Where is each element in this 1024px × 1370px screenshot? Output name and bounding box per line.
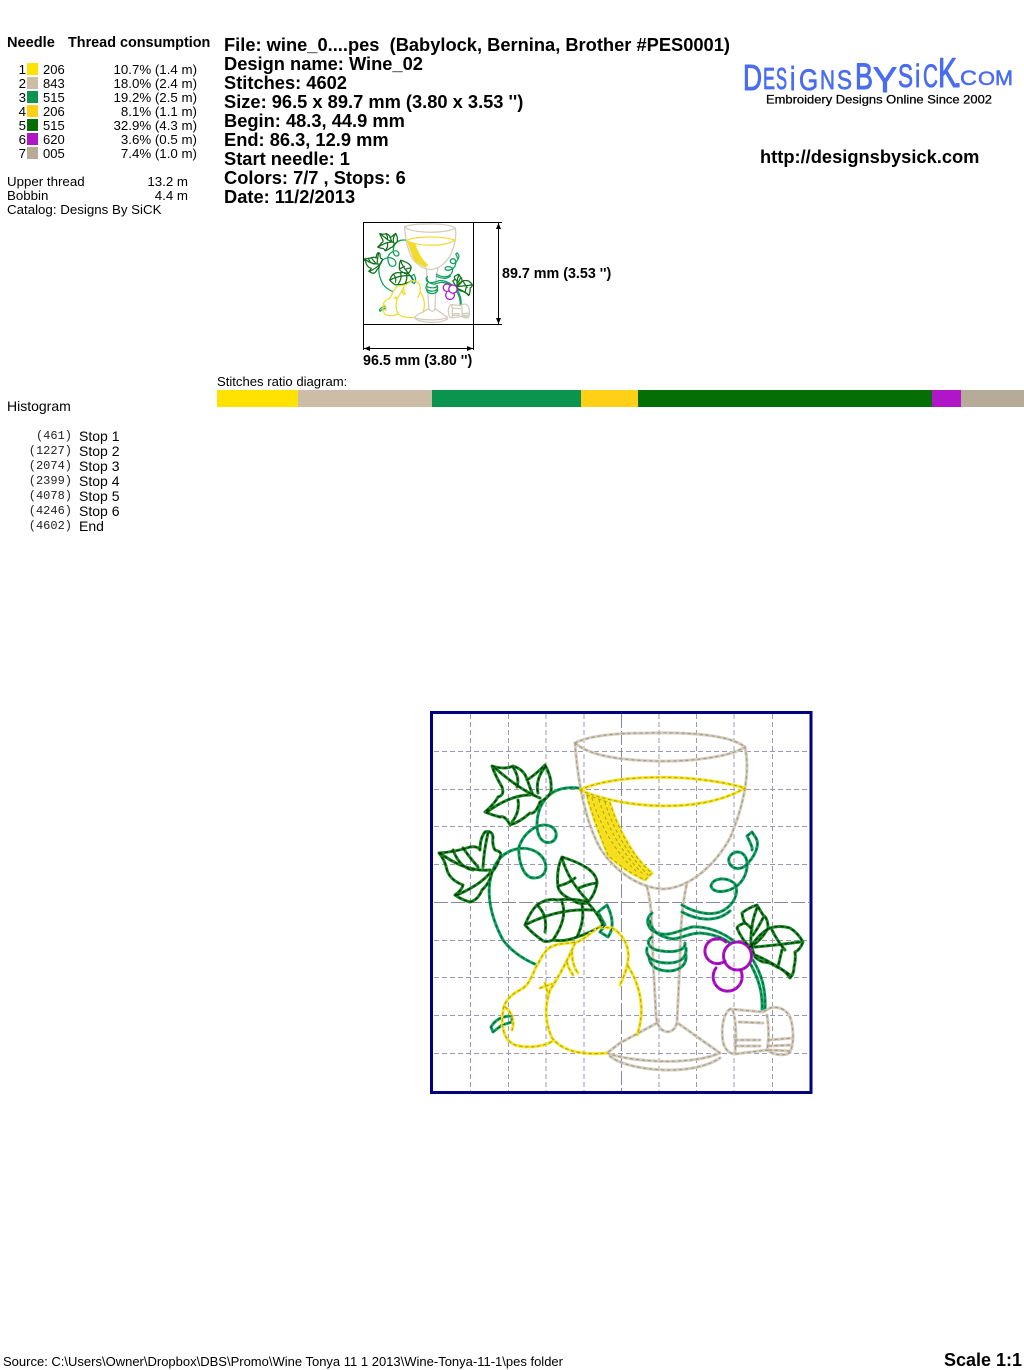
text block: design information: Begin: 48.3, 44.9 mm xyxy=(224,110,405,131)
grapes xyxy=(705,939,752,991)
thread row 5: 515 xyxy=(43,118,65,133)
thread row 1: 1 xyxy=(19,62,26,77)
panel: needle and thread consumption table xyxy=(7,35,210,217)
thread row 3: 3 xyxy=(19,90,26,105)
logo: Designs By SiCK: S xyxy=(898,58,913,94)
thread row 4: 206 xyxy=(43,104,65,119)
logo: Designs By SiCK: S xyxy=(837,66,852,95)
stop list: (4078) xyxy=(29,489,72,503)
stop list: Stop 6 xyxy=(79,503,119,519)
thread row 2: 18.0% (2.4 m) xyxy=(113,76,197,91)
chart: stitches ratio bar xyxy=(217,390,1024,407)
stop list: Stop 1 xyxy=(79,428,119,444)
website url: http://designsbysick.com xyxy=(760,146,979,167)
panel: embroidery preview at full scale xyxy=(432,712,811,1092)
thread row 6: 6 xyxy=(19,132,26,147)
logo: Designs By SiCK: . xyxy=(953,57,962,94)
thread row 6: 3.6% (0.5 m) xyxy=(121,132,197,147)
thumbnail artwork xyxy=(364,224,472,322)
leaves xyxy=(439,765,803,978)
thread row 3 xyxy=(19,90,197,105)
thread row 2: 843 xyxy=(43,76,65,91)
stop list: (461) xyxy=(36,429,72,443)
text block: design information: Colors: 7/7 , Stops: 6 xyxy=(224,167,406,188)
logo: Designs By SiCK: E xyxy=(763,62,775,96)
embroidery artwork xyxy=(439,733,803,1070)
logo: Designs By SiCK: D xyxy=(743,57,762,98)
thread totals and catalog: Catalog: Designs By SiCK xyxy=(7,202,161,217)
logo: Designs By SiCK: i xyxy=(915,59,920,95)
stop list: Stop 2 xyxy=(79,443,119,459)
preview frame xyxy=(432,712,811,1092)
scale label: Scale 1:1 xyxy=(944,1350,1022,1370)
text block: design information: Date: 11/2/2013 xyxy=(224,186,355,207)
grid xyxy=(434,714,809,1091)
wine surface and satin band xyxy=(580,777,745,880)
logo: Designs By SiCK: Embroidery Designs Online Since 2002 xyxy=(766,92,992,106)
thread row 1: 206 xyxy=(43,62,65,77)
stop list: (4246) xyxy=(29,504,72,518)
thread totals and catalog: Upper thread xyxy=(7,174,85,189)
thread row 3: 19.2% (2.5 m) xyxy=(113,90,197,105)
logo: Designs By SiCK: O xyxy=(978,68,995,90)
thread row 4 xyxy=(18,104,197,119)
thread totals and catalog: 13.2 m xyxy=(147,174,188,189)
logo: Designs By SiCK: i xyxy=(790,61,795,98)
stop list: (4602) xyxy=(29,519,72,533)
stop list: Stop 5 xyxy=(79,488,119,504)
dimension lines xyxy=(364,222,502,350)
text block: design information: File: wine_0....pes (Babylock, Bernina, Brother #PES0001) xyxy=(224,34,730,55)
vine xyxy=(489,788,765,1032)
width dimension label: 96.5 mm (3.80 '') xyxy=(363,353,473,369)
stop list xyxy=(29,428,120,534)
logo: Designs By SiCK: N xyxy=(820,67,835,96)
height dimension label: 89.7 mm (3.53 '') xyxy=(502,266,612,282)
stitch dashes xyxy=(439,733,803,1070)
thread row 7 xyxy=(19,146,197,161)
thread row 4: 4 xyxy=(19,104,26,119)
thread row 1: 10.7% (1.4 m) xyxy=(113,62,197,77)
stop list: (1227) xyxy=(29,444,72,458)
logo: Designs By SiCK: G xyxy=(799,63,818,97)
thread row 7: 7 xyxy=(19,146,26,161)
text block: design information xyxy=(224,34,730,207)
dimension arrowheads xyxy=(364,223,501,351)
text block: design information: Start needle: 1 xyxy=(224,148,350,169)
text block: design information: Size: 96.5 x 89.7 mm (3.80 x 3.53 '') xyxy=(224,91,523,112)
logo: Designs By SiCK: S xyxy=(776,63,787,96)
stop list: End xyxy=(79,518,104,534)
heading: thread consumption: Thread consumption xyxy=(68,35,210,51)
stop list: Stop 3 xyxy=(79,458,119,474)
label: stitches ratio diagram: Stitches ratio diagram: xyxy=(217,374,347,389)
text block: design information: Design name: Wine_02 xyxy=(224,53,423,74)
thread row 1 xyxy=(19,62,197,77)
thread row 2 xyxy=(19,76,197,91)
logo: Designs By SiCK: C xyxy=(960,66,977,90)
thread row 5: 5 xyxy=(19,118,26,133)
wine glass xyxy=(575,733,747,1070)
thread row 6: 620 xyxy=(43,132,65,147)
source path: Source: C:\Users\Owner\Dropbox\DBS\Promo\Wine Tonya 11 1 2013\Wine-Tonya-11-1\pes folder xyxy=(3,1354,563,1369)
thread row 3: 515 xyxy=(43,90,65,105)
logo: Designs By SiCK: M xyxy=(995,66,1013,90)
thread row 7: 005 xyxy=(43,146,65,161)
panel: histogram stops xyxy=(7,398,120,534)
heading: histogram: Histogram xyxy=(7,398,71,414)
thread row 4: 8.1% (1.1 m) xyxy=(121,104,197,119)
stop list: Stop 4 xyxy=(79,473,119,489)
stop list: (2399) xyxy=(29,474,72,488)
thread row 2: 2 xyxy=(19,76,26,91)
thread totals and catalog: Bobbin xyxy=(7,188,48,203)
cork xyxy=(722,1007,793,1055)
thread row 7: 7.4% (1.0 m) xyxy=(121,146,197,161)
thread row 5 xyxy=(19,118,197,133)
text block: design information: End: 86.3, 12.9 mm xyxy=(224,129,389,150)
panel: thumbnail with dimension lines xyxy=(363,222,612,369)
logo: Designs By SiCK xyxy=(743,52,1013,106)
logo: Designs By SiCK: B xyxy=(855,55,873,97)
thread totals and catalog xyxy=(7,174,188,217)
thread totals and catalog: 4.4 m xyxy=(155,188,188,203)
text block: design information: Stitches: 4602 xyxy=(224,72,347,93)
thread row 5: 32.9% (4.3 m) xyxy=(113,118,197,133)
pears xyxy=(502,927,641,1054)
stop list: (2074) xyxy=(29,459,72,473)
logo: Designs By SiCK: C xyxy=(923,58,938,94)
logo: Designs By SiCK: Y xyxy=(873,61,897,100)
heading: needle: Needle xyxy=(7,35,55,51)
thread row 6 xyxy=(19,132,197,147)
